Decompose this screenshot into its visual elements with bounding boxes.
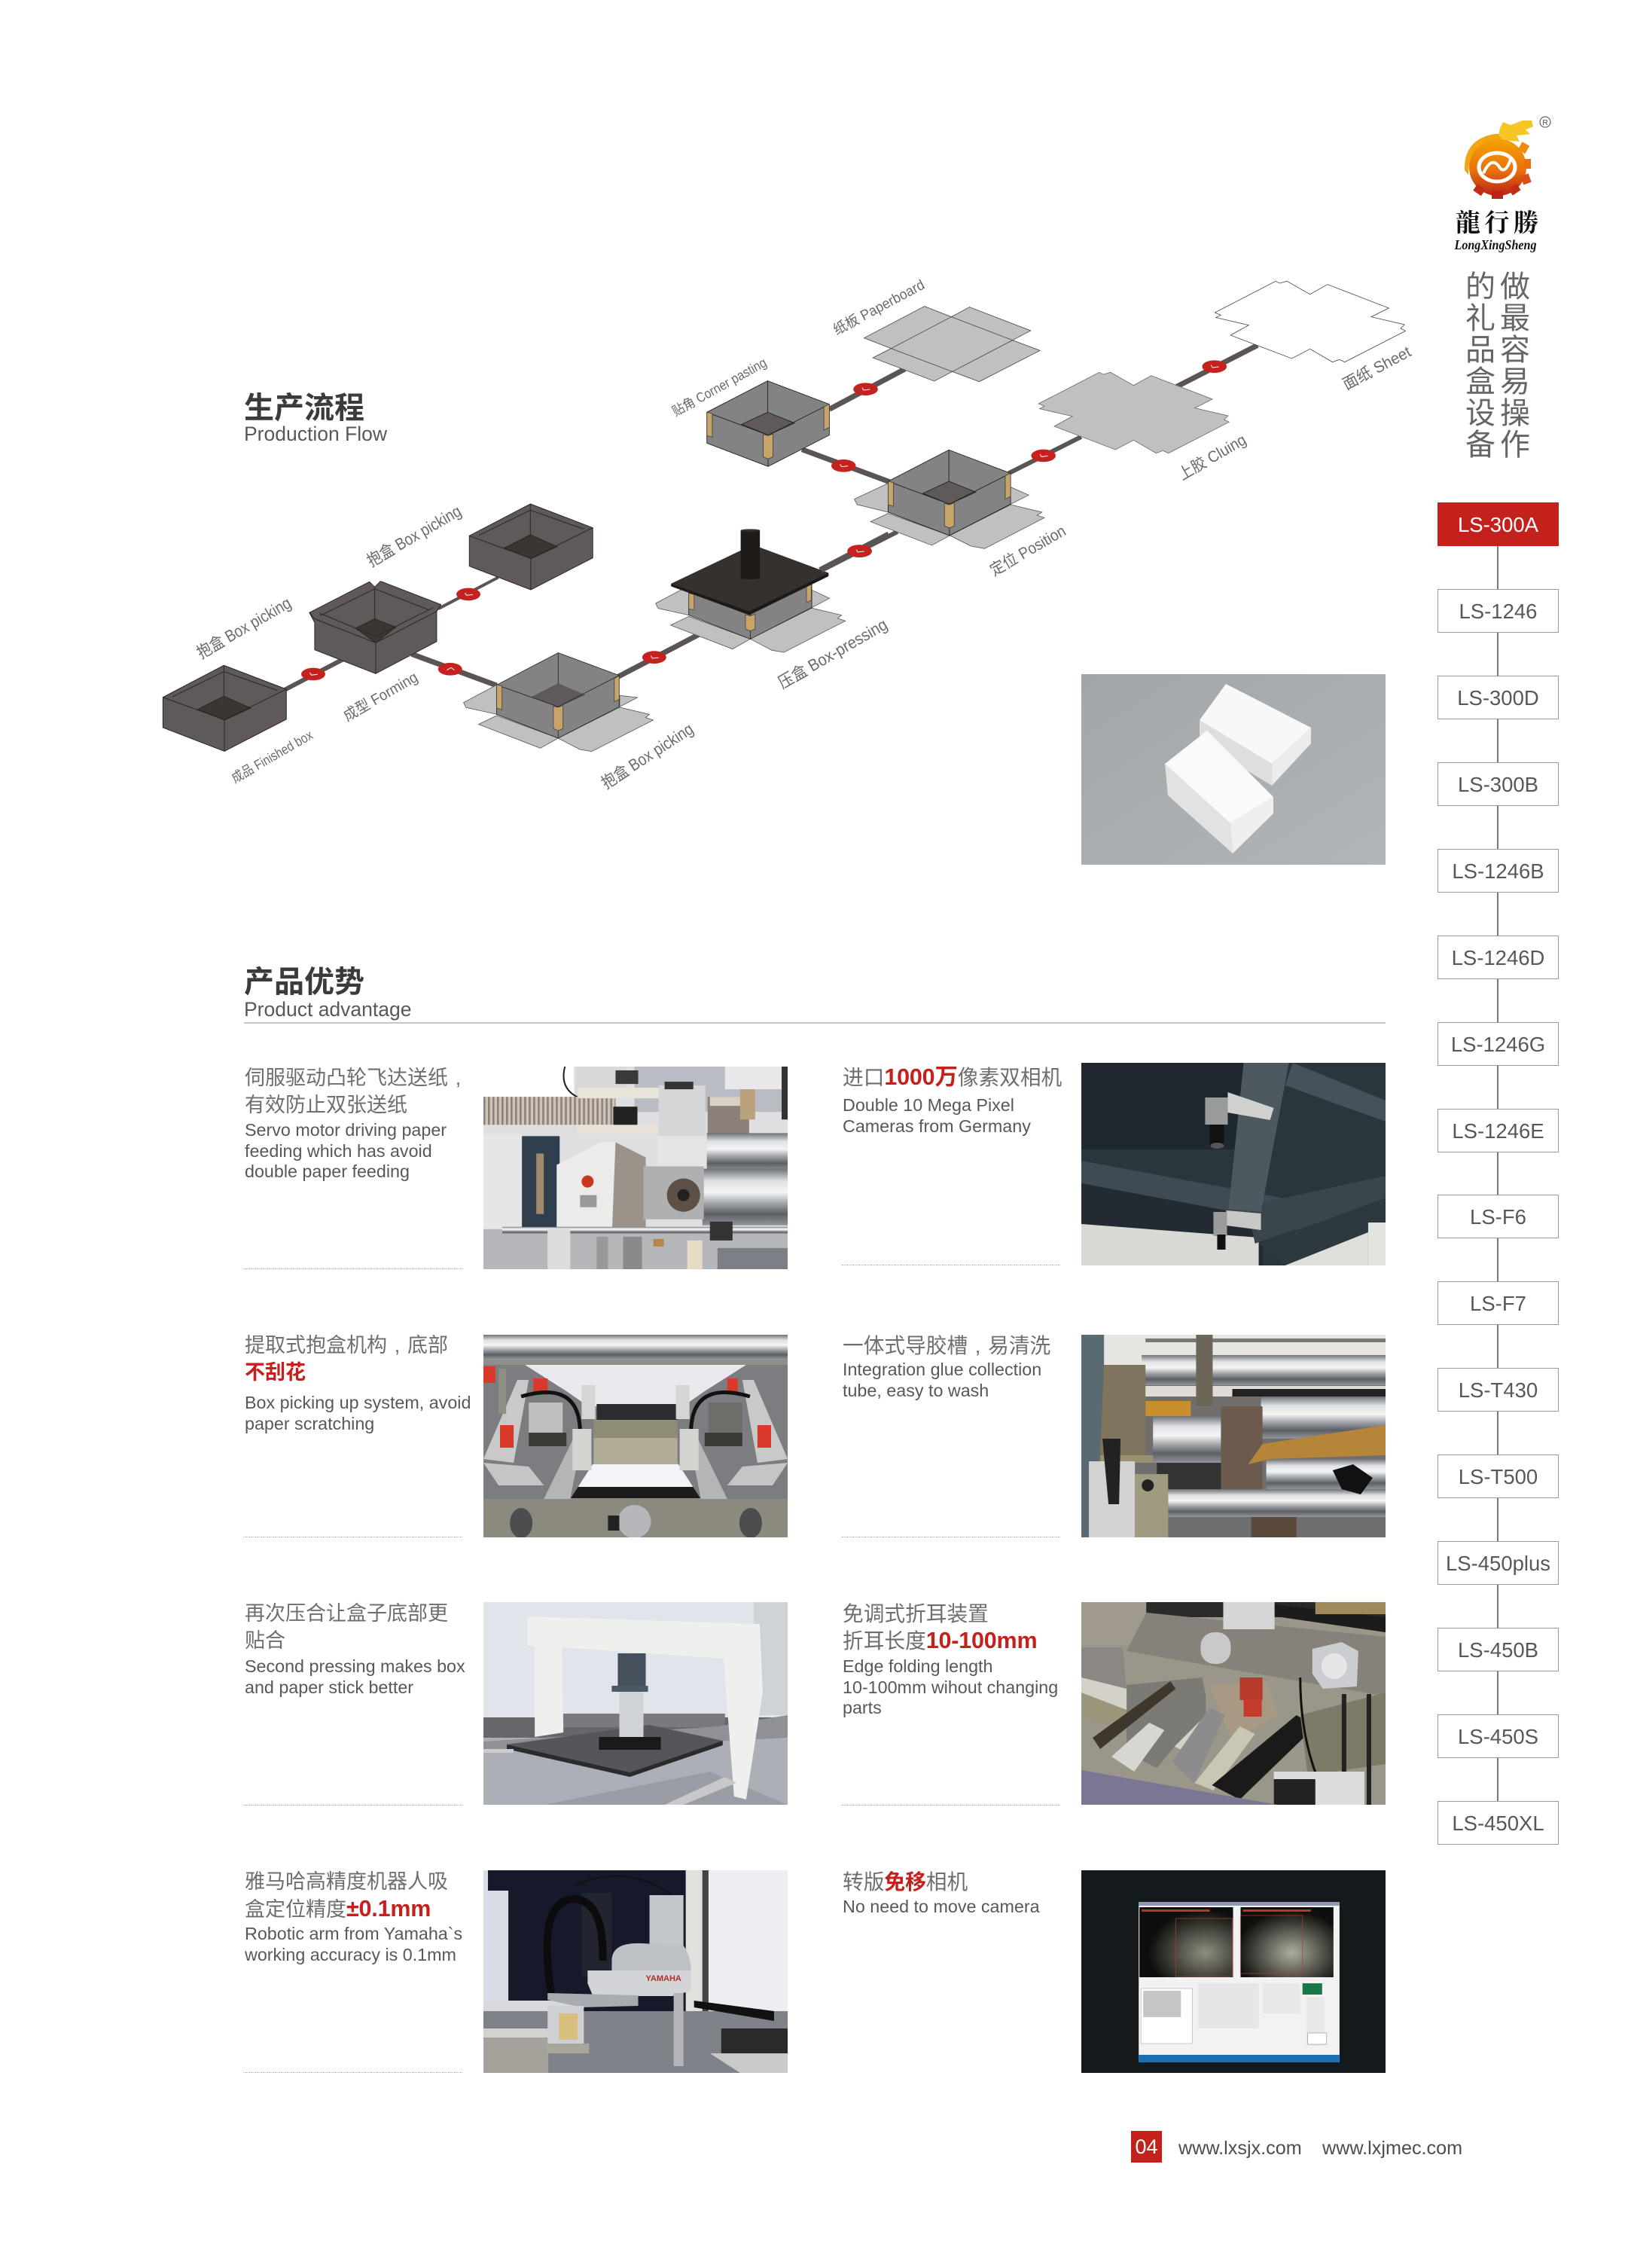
page number <box>1131 2131 1162 2163</box>
feature title: 进口1000万像素双相机 <box>843 1064 1062 1090</box>
box: picked box <box>469 504 593 590</box>
feature description: paper scratching <box>245 1413 374 1433</box>
brand logo <box>1450 113 1555 256</box>
glued sheet <box>1038 372 1229 453</box>
panel: yamaha robot <box>242 1870 788 2074</box>
model navigation: LS-1246D <box>1452 946 1544 969</box>
photo: yamaha robot arm: YAMAHA <box>646 1974 681 1983</box>
box: pressing with plate and cylinder <box>656 529 846 652</box>
feature description: double paper feeding <box>245 1161 410 1181</box>
model tab: active: LS-300A <box>1458 513 1538 536</box>
feature title: , <box>975 1334 980 1357</box>
panel: edge folding <box>840 1602 1386 1806</box>
paperboard blank <box>864 307 1040 382</box>
vertical slogan: 盒 <box>1465 365 1495 398</box>
heading: product advantage: 产品优势 <box>244 966 364 999</box>
model navigation: LS-450S <box>1458 1725 1538 1748</box>
vertical slogan <box>1465 271 1532 462</box>
model navigation: LS-450plus <box>1446 1552 1550 1575</box>
feature description: parts <box>843 1698 882 1717</box>
feature description: 10-100mm wihout changing <box>843 1677 1058 1696</box>
panel: no camera move <box>840 1870 1386 2074</box>
process labels: 抱盒 Box picking <box>364 502 465 570</box>
process labels: 定位 Position <box>987 522 1069 579</box>
feature description <box>843 1656 1058 1719</box>
model navigation: LS-300D <box>1457 686 1539 710</box>
feature title: 不刮花 <box>245 1360 306 1383</box>
process labels: 成品 Finished box <box>229 728 316 786</box>
feature title <box>245 1067 461 1116</box>
box: forming with flaps <box>309 581 441 673</box>
feature description: Second pressing makes box <box>245 1656 465 1676</box>
process labels: 贴角 Corner pasting <box>669 355 769 419</box>
heading: production flow <box>244 392 387 445</box>
box: picking onto paper <box>464 653 654 752</box>
process labels: 上胶 Cluing <box>1175 431 1249 484</box>
feature title: 伺服驱动凸轮飞达送纸 <box>245 1067 448 1089</box>
feature title <box>245 1602 448 1651</box>
feature title <box>245 1869 448 1923</box>
vertical slogan: 做 <box>1500 270 1530 304</box>
feature title: 有效防止双张送纸 <box>245 1094 407 1116</box>
model navigation: LS-450B <box>1458 1638 1538 1662</box>
panel: box picking system <box>243 1334 788 1537</box>
model navigation: LS-F6 <box>1470 1205 1526 1229</box>
feature description <box>245 1393 471 1433</box>
feature description: Servo motor driving paper <box>245 1120 447 1140</box>
vertical slogan: 易 <box>1500 365 1530 398</box>
photo: edge folding device <box>1081 1602 1386 1805</box>
vertical slogan: 备 <box>1465 429 1495 462</box>
photo: servo motor feeder <box>483 1067 788 1269</box>
photo: pressing station <box>483 1602 788 1805</box>
photo: box picking mechanism <box>483 1335 788 1537</box>
feature description: Box picking up system, avoid <box>245 1393 471 1412</box>
panel: dual cameras <box>841 1063 1386 1265</box>
photo: cameras on beam <box>1081 1063 1386 1265</box>
process labels: 抱盒 Box picking <box>598 719 697 792</box>
model navigation: LS-1246 <box>1459 600 1537 623</box>
left half of the flow <box>163 504 889 752</box>
vertical slogan: 礼 <box>1465 302 1495 335</box>
box: corner pasting <box>707 381 829 466</box>
model tab: active <box>1438 502 1559 546</box>
vertical slogan: 操 <box>1500 397 1530 430</box>
right half of the flow <box>707 281 1405 570</box>
feature title: 转版免移相机 <box>843 1870 968 1894</box>
feature title: 免调式折耳装置 <box>843 1602 989 1625</box>
brand name latin: LongXingSheng <box>1454 237 1536 252</box>
feature title <box>245 1334 448 1383</box>
process labels <box>194 276 1414 792</box>
feature title: , <box>395 1334 400 1357</box>
feature title: 一体式导胶槽 易清洗 <box>843 1334 1050 1357</box>
feature description: Edge folding length <box>843 1656 992 1676</box>
model navigation: LS-300B <box>1458 773 1538 796</box>
photo: camera software screen <box>1081 1870 1386 2073</box>
process labels: 压盒 Box-pressing <box>775 615 891 692</box>
footer <box>1131 2131 1464 2163</box>
heading: production flow: Production Flow <box>244 423 387 445</box>
feature description: Integration glue collection <box>843 1360 1041 1379</box>
process labels: 成型 Forming <box>340 668 421 725</box>
heading: product advantage: Product advantage <box>244 998 411 1021</box>
vertical slogan: 的 <box>1465 270 1495 304</box>
white face sheet <box>1215 281 1405 362</box>
vertical slogan: 作 <box>1500 429 1530 462</box>
photo: yamaha robot arm <box>483 1870 788 2073</box>
feature title <box>843 1601 1037 1654</box>
panel: servo motor feeding <box>243 1067 788 1269</box>
vertical slogan: 品 <box>1465 334 1495 367</box>
feature title: 雅马哈高精度机器人吸 <box>245 1870 448 1893</box>
feature description <box>245 1924 462 1965</box>
vertical slogan: 最 <box>1500 302 1530 335</box>
feature description: Double 10 Mega Pixel <box>843 1095 1014 1115</box>
website 1: www.lxsjx.com <box>1178 2138 1302 2159</box>
arrow nodes <box>831 360 1227 557</box>
feature description: tube, easy to wash <box>843 1380 989 1400</box>
process labels: 面纸 Sheet <box>1340 343 1414 393</box>
model navigation: LS-T430 <box>1459 1378 1538 1402</box>
feature description <box>843 1095 1031 1136</box>
feature title: , <box>456 1067 461 1089</box>
heading: production flow: 生产流程 <box>244 392 364 425</box>
feature title: 折耳长度10-100mm <box>843 1627 1037 1653</box>
model navigation: LS-F7 <box>1470 1292 1526 1315</box>
model navigation <box>1438 502 1559 1844</box>
brand name chinese: 龍行勝 <box>1456 203 1538 239</box>
feature title: 提取式抱盒机构 底部 <box>245 1334 448 1357</box>
panel: second pressing <box>243 1602 788 1806</box>
heading: product advantage <box>244 966 411 1021</box>
photo: white paper stacks <box>1081 674 1386 865</box>
process labels: 纸板 Paperboard <box>831 276 928 338</box>
panel: integrated glue tube <box>841 1334 1386 1537</box>
feature description: and paper stick better <box>245 1677 413 1696</box>
process labels: 抱盒 Box picking <box>194 594 294 662</box>
feature description: feeding which has avoid <box>245 1140 432 1160</box>
feature title: 贴合 <box>245 1629 285 1651</box>
registered mark: R <box>1542 119 1548 127</box>
feature description: Cameras from Germany <box>843 1116 1031 1136</box>
feature title: 再次压合让盒子底部更 <box>245 1602 448 1625</box>
box: position on paper <box>855 450 1044 548</box>
box: finished box <box>163 665 286 751</box>
arrow nodes <box>301 545 871 680</box>
feature description: working accuracy is 0.1mm <box>245 1945 456 1964</box>
vertical slogan: 设 <box>1465 397 1495 430</box>
model navigation: LS-450XL <box>1452 1812 1544 1835</box>
page number: 04 <box>1135 2135 1158 2158</box>
feature description: Robotic arm from Yamaha`s <box>245 1924 462 1943</box>
registered mark <box>1540 117 1550 127</box>
feature description <box>843 1360 1041 1400</box>
feature description: No need to move camera <box>843 1897 1040 1916</box>
icon: gear and swirl <box>1465 121 1533 199</box>
feature description <box>245 1120 447 1181</box>
feature description <box>245 1656 465 1698</box>
model navigation: LS-1246E <box>1452 1119 1544 1143</box>
website 2: www.lxjmec.com <box>1322 2138 1462 2159</box>
feature title: 盒定位精度±0.1mm <box>245 1895 431 1921</box>
model navigation: LS-T500 <box>1459 1465 1538 1488</box>
model navigation: LS-1246G <box>1451 1033 1545 1056</box>
production flow diagram <box>163 276 1414 792</box>
model navigation: LS-1246B <box>1452 859 1544 883</box>
vertical slogan: 容 <box>1500 334 1530 367</box>
photo: glue tank rollers <box>1081 1335 1386 1537</box>
